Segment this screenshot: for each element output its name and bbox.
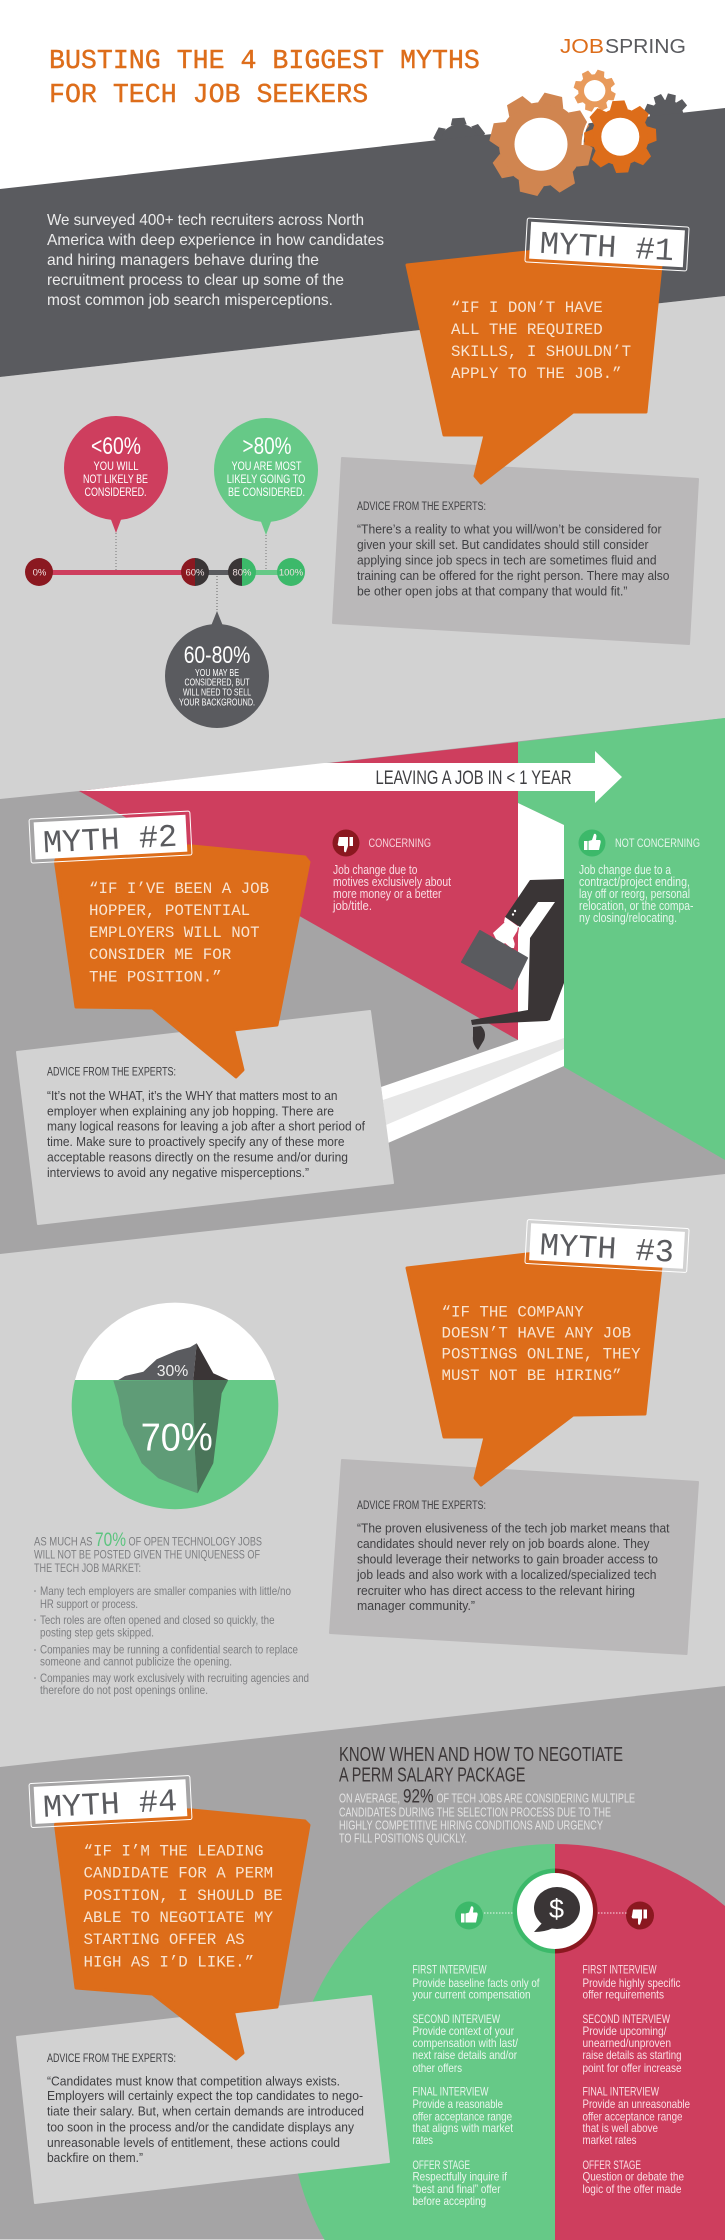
panel: myth 3 speech bubble: POSTINGS ONLINE, THEY xyxy=(442,1346,641,1364)
heading: negotiate a perm salary package: KNOW WHEN AND HOW TO NEGOTIATE xyxy=(339,1744,623,1766)
panel: not concerning: lay off or reorg, personal xyxy=(579,887,690,901)
intro text: recruitment process to clear up some of the xyxy=(47,272,344,289)
panel: myth 4 advice box xyxy=(17,1996,389,2203)
text block: as much as 70 percent: WILL NOT BE POSTED GIVEN THE UNIQUENESS OF xyxy=(34,1548,260,1562)
panel: myth 3 advice box: “The proven elusiveness of the tech job market means that xyxy=(357,1520,670,1536)
column: what to do: FINAL INTERVIEW xyxy=(412,2084,489,2098)
column: what to do: Respectfully inquire if xyxy=(412,2170,508,2184)
column: what to do: Provide a reasonable xyxy=(412,2097,503,2111)
timeline bar: 0% xyxy=(33,568,47,578)
panel: myth 3 advice box: ADVICE FROM THE EXPERTS: xyxy=(357,1500,486,1512)
panel: not concerning xyxy=(578,830,700,925)
list: reasons jobs are not posted: Companies may be running a confidential search to replace xyxy=(40,1642,298,1656)
bubble: over 80 percent: LIKELY GOING TO xyxy=(227,472,305,486)
gear: dark left xyxy=(432,118,486,166)
gear: tan large xyxy=(488,92,594,197)
column: what to do: FIRST INTERVIEW xyxy=(412,1962,487,1976)
column: what not to do: Provide an unreasonable xyxy=(582,2097,690,2111)
panel: myth 1 advice box xyxy=(333,458,698,644)
bubble: over 80 percent: BE CONSIDERED. xyxy=(228,485,305,499)
panel: not concerning: ny closing/relocating. xyxy=(579,911,677,925)
panel: myth 2 advice box: time. Make sure to proactively specify any of these more xyxy=(47,1134,344,1149)
bubble: under 60 percent: NOT LIKELY BE xyxy=(83,472,148,486)
text block: on average 92 percent: OF TECH JOBS ARE CONSIDERING MULTIPLE xyxy=(436,1792,635,1806)
column: what not to do: FIRST INTERVIEW xyxy=(582,1962,657,1976)
panel: myth 3 advice box: should leverage their networks to gain broader access to xyxy=(357,1552,658,1566)
panel: myth 1 speech bubble: APPLY TO THE JOB.” xyxy=(451,365,622,383)
column: what not to do: Question or debate the xyxy=(582,2170,684,2184)
list: reasons jobs are not posted xyxy=(34,1584,309,1697)
logo: Jobspring: JOB xyxy=(560,36,604,58)
gear: orange xyxy=(584,100,657,173)
panel: concerning xyxy=(332,830,451,913)
column: what to do: other offers xyxy=(412,2061,462,2075)
panel: myth 3 advice box xyxy=(330,1460,698,1654)
bubble: 60 to 80 percent: YOUR BACKGROUND. xyxy=(179,696,255,708)
icon: speech bubble with dollar sign: $ xyxy=(549,1894,564,1924)
panel: myth 4 advice box: tiate their salary. But, when certain demands are introduced xyxy=(47,2104,364,2118)
panel: concerning: motives exclusively about xyxy=(333,875,451,889)
column: what not to do: market rates xyxy=(582,2133,636,2147)
panel: myth 1 speech bubble: ALL THE REQUIRED xyxy=(451,321,603,339)
bubble: over 80 percent: >80% xyxy=(242,433,292,460)
column: what to do: Provide baseline facts only of xyxy=(412,1976,540,1990)
title: BUSTING THE 4 BIGGEST MYTHS xyxy=(49,46,480,76)
panel: leaving a job backdrop xyxy=(79,718,725,1160)
list: reasons jobs are not posted: Tech roles are often opened and closed so quickly, the xyxy=(40,1613,275,1627)
panel: myth 2 advice box: many logical reasons for leaving a job after a short period of xyxy=(47,1118,365,1134)
column: what to do: that aligns with market xyxy=(412,2121,514,2135)
text block: on average 92 percent: HIGHLY COMPETITIVE HIRING CONDITIONS AND URGENCY xyxy=(339,1818,603,1832)
panel: myth 2 speech bubble: EMPLOYERS WILL NOT xyxy=(89,924,260,942)
panel: myth 4 speech bubble: HIGH AS I’D LIKE.” xyxy=(84,1954,254,1972)
column: what to do: rates xyxy=(412,2133,433,2147)
bubble: 60 to 80 percent: YOU MAY BE xyxy=(195,667,239,679)
dark band xyxy=(0,108,725,377)
column: what to do: before accepting xyxy=(412,2194,486,2208)
arrow: leaving a job in under 1 year xyxy=(79,751,622,803)
panel: myth 4 speech bubble: CANDIDATE FOR A PERM xyxy=(84,1864,273,1882)
panel: myth 3 speech bubble: MUST NOT BE HIRING” xyxy=(442,1367,622,1385)
chart: negotiation do and don't circle xyxy=(290,1844,725,2240)
panel: myth 4 speech bubble: “IF I’M THE LEADING xyxy=(84,1842,264,1860)
panel: myth 3 advice box: job leads and also work with a localized/specialized tech xyxy=(356,1567,656,1582)
column: what not to do: logic of the offer made xyxy=(582,2182,682,2196)
panel: myth 1 advice box: applying since job specs in tech are sometimes fluid and xyxy=(357,552,656,568)
column: what not to do xyxy=(582,1962,690,2196)
bubble: under 60 percent: <60% xyxy=(91,433,141,460)
illustration: person walking out with briefcase xyxy=(462,879,564,1050)
list: reasons jobs are not posted: HR support or process. xyxy=(40,1597,138,1611)
panel: myth 1 advice box: given your skill set. But candidates should still consider xyxy=(357,537,649,552)
text block: on average 92 percent: CANDIDATES DURING THE SELECTION PROCESS DUE TO THE xyxy=(339,1806,611,1820)
bubble: under 60 percent xyxy=(64,416,168,570)
text block: on average 92 percent: 92% xyxy=(403,1786,434,1808)
timeline bar: 100% xyxy=(279,568,304,578)
text block: on average 92 percent: TO FILL POSITIONS QUICKLY. xyxy=(339,1832,467,1846)
list: reasons jobs are not posted: Companies may work exclusively with recruiting agencies and xyxy=(40,1671,309,1685)
bubble: 60 to 80 percent: 60-80% xyxy=(184,642,250,669)
panel: myth 4 advice box: backfire on them.” xyxy=(47,2150,143,2165)
panel: myth 4 speech bubble: ABLE TO NEGOTIATE MY xyxy=(84,1909,274,1927)
panel: myth 2 advice box: acceptable reasons directly on the resume and/or during xyxy=(47,1150,348,1164)
heading: negotiate a perm salary package xyxy=(339,1744,623,1786)
panel: myth 2 advice box: employer when explaining any job hopping. There are xyxy=(47,1104,334,1118)
column: what not to do: Provide highly specific xyxy=(582,1976,680,1990)
panel: myth 4 speech bubble: STARTING OFFER AS xyxy=(84,1931,245,1949)
panel: not concerning: Job change due to a xyxy=(579,863,671,877)
column: what to do: SECOND INTERVIEW xyxy=(412,2012,500,2026)
bubble: over 80 percent xyxy=(214,418,318,570)
bubble: over 80 percent: YOU ARE MOST xyxy=(232,459,302,473)
logo: Jobspring: SPRING xyxy=(605,36,686,58)
panel: concerning: CONCERNING xyxy=(368,836,431,850)
column: what to do: OFFER STAGE xyxy=(412,2158,470,2172)
panel: myth 3 advice box: recruiter who has direct access to the relevant hiring xyxy=(357,1583,635,1598)
list: reasons jobs are not posted: someone and cannot publicize the opening. xyxy=(40,1654,232,1668)
panel: myth 1 advice box: be other open jobs at that company that would fit.” xyxy=(357,584,628,598)
intro text: and hiring managers behave during the xyxy=(47,252,319,269)
heading: negotiate a perm salary package: A PERM SALARY PACKAGE xyxy=(339,1764,526,1786)
list: reasons jobs are not posted: posting step gets skipped. xyxy=(40,1626,154,1640)
arrow: leaving a job in under 1 year: LEAVING A JOB IN < 1 YEAR xyxy=(376,767,572,789)
bubble: under 60 percent: YOU WILL xyxy=(94,459,139,473)
panel: myth 2 advice box: ADVICE FROM THE EXPERTS: xyxy=(47,1066,176,1078)
column: what not to do: SECOND INTERVIEW xyxy=(582,2012,670,2026)
timeline bar: 80% xyxy=(232,568,252,578)
icon: speech bubble with dollar sign xyxy=(512,1868,598,1954)
panel: myth 1 speech bubble: SKILLS, I SHOULDN’T xyxy=(451,343,631,361)
column: what not to do: raise details as starting xyxy=(582,2048,682,2062)
icon: front gears xyxy=(488,92,657,197)
timeline bar xyxy=(25,558,305,586)
panel: not concerning: NOT CONCERNING xyxy=(615,836,700,850)
panel: myth 4 advice box: Employers will certainly expect the top candidates to nego- xyxy=(47,2088,363,2103)
text block: as much as 70 percent: OF OPEN TECHNOLOGY JOBS xyxy=(128,1534,262,1548)
panel: myth 3 speech bubble: “IF THE COMPANY xyxy=(442,1304,584,1322)
column: what to do: next raise details and/or xyxy=(412,2048,517,2062)
panel: myth 2 speech bubble: HOPPER, POTENTIAL xyxy=(89,902,250,920)
icon: thumbs down xyxy=(626,1902,654,1930)
title: FOR TECH JOB SEEKERS xyxy=(49,80,368,110)
column: what not to do: offer requirements xyxy=(582,1988,664,2002)
label: myth 3 xyxy=(525,1220,689,1272)
column: what not to do: point for offer increase xyxy=(582,2061,682,2075)
bubble: under 60 percent: CONSIDERED. xyxy=(84,485,146,499)
title xyxy=(49,46,480,110)
text block: as much as 70 percent: THE TECH JOB MARKET: xyxy=(34,1561,141,1575)
panel: myth 2 speech bubble xyxy=(56,845,309,1077)
icon: thumbs up xyxy=(578,830,606,856)
intro text: most common job search misperceptions. xyxy=(47,292,333,309)
gear: light orange xyxy=(573,69,616,112)
icon: thumbs down xyxy=(332,830,360,856)
panel: myth 3 speech bubble xyxy=(407,1239,664,1485)
column: what to do: Provide context of your xyxy=(412,2024,514,2038)
panel: concerning: more money or a better xyxy=(333,887,442,901)
bubble: 60 to 80 percent: WILL NEED TO SELL xyxy=(183,686,251,698)
column: what not to do: FINAL INTERVIEW xyxy=(582,2084,659,2098)
list: reasons jobs are not posted: therefore do not post openings online. xyxy=(40,1683,208,1697)
label: myth 1: MYTH #1 xyxy=(539,226,675,270)
panel: myth 4 speech bubble xyxy=(56,1808,309,2059)
chart: iceberg 30 / 70: 30% xyxy=(157,1363,188,1380)
text block: on average 92 percent xyxy=(339,1786,635,1846)
panel: myth 2 advice box xyxy=(17,1011,393,1224)
panel: myth 4 advice box: “Candidates must know that competition always exists. xyxy=(47,2074,340,2088)
label: myth 4: MYTH #4 xyxy=(42,1783,178,1827)
panel: myth 2 speech bubble: THE POSITION.” xyxy=(89,968,222,986)
text block: as much as 70 percent: 70% xyxy=(95,1530,126,1551)
timeline bar: 60% xyxy=(185,568,205,578)
panel: myth 1 advice box: ADVICE FROM THE EXPERTS: xyxy=(357,501,486,513)
panel: myth 2 speech bubble: “IF I’VE BEEN A JOB xyxy=(89,880,269,898)
column: what to do: offer acceptance range xyxy=(412,2110,512,2124)
panel: myth 2 speech bubble: CONSIDER ME FOR xyxy=(89,946,232,964)
panel: concerning: job/title. xyxy=(332,899,372,913)
logo: Jobspring xyxy=(560,36,686,58)
panel: myth 2 advice box: interviews to avoid any negative misperceptions.” xyxy=(47,1165,309,1180)
intro text: America with deep experience in how candidates xyxy=(47,232,384,249)
column: what to do: compensation with last/ xyxy=(412,2036,519,2050)
panel: myth 1 advice box: “There’s a reality to what you will/won’t be considered for xyxy=(357,522,662,536)
panel: myth 3 advice box: manager community.” xyxy=(357,1598,475,1613)
panel: not concerning: contract/project ending, xyxy=(579,875,690,889)
panel: myth 4 advice box: too soon in the process and/or the candidate displays any xyxy=(47,2120,354,2134)
label: myth 1 xyxy=(525,218,689,271)
column: what to do: “best and final” offer xyxy=(412,2182,500,2196)
panel: myth 4 advice box: unreasonable levels of entitlement, these actions could xyxy=(47,2135,340,2150)
list: reasons jobs are not posted: Many tech employers are smaller companies with little/no xyxy=(40,1584,291,1598)
panel: myth 3 speech bubble: DOESN’T HAVE ANY JOB xyxy=(442,1324,631,1342)
intro text xyxy=(47,212,384,309)
column: what not to do: that is well above xyxy=(582,2121,658,2135)
column: what not to do: unearned/unproven xyxy=(582,2036,671,2050)
chart: skills match timeline xyxy=(25,416,318,728)
label: myth 2: MYTH #2 xyxy=(42,819,178,862)
intro text: We surveyed 400+ tech recruiters across North xyxy=(47,212,364,229)
bubble: 60 to 80 percent: CONSIDERED, BUT xyxy=(184,676,250,688)
panel: myth 4 advice box: ADVICE FROM THE EXPERTS: xyxy=(47,2053,176,2065)
icon: gears xyxy=(432,69,688,166)
panel: myth 1 speech bubble xyxy=(407,236,664,483)
panel: myth 2 advice box: “It’s not the WHAT, it’s the WHY that matters most to an xyxy=(47,1088,338,1103)
bubble: 60 to 80 percent xyxy=(165,576,269,728)
label: myth 3: MYTH #3 xyxy=(539,1227,675,1272)
panel: myth 1 speech bubble: “IF I DON’T HAVE xyxy=(451,299,603,317)
panel: myth 4 speech bubble: POSITION, I SHOULD BE xyxy=(84,1887,283,1905)
panel: myth 1 advice box: training can be offered for the right person. There may also xyxy=(357,568,670,583)
panel: myth 3 advice box: candidates should never rely on job boards alone. They xyxy=(357,1536,650,1551)
gear: dark right xyxy=(644,93,688,134)
text block: on average 92 percent: ON AVERAGE, xyxy=(339,1792,400,1806)
column: what not to do: offer acceptance range xyxy=(582,2110,683,2124)
chart: iceberg 30 / 70 xyxy=(72,1303,278,1509)
text block: as much as 70 percent: AS MUCH AS xyxy=(34,1534,92,1548)
column: what not to do: OFFER STAGE xyxy=(582,2158,641,2172)
panel: not concerning: relocation, or the compa- xyxy=(579,899,694,913)
column: what not to do: Provide upcoming/ xyxy=(582,2024,667,2038)
chart: iceberg 30 / 70: 70% xyxy=(141,1416,213,1460)
column: what to do: your current compensation xyxy=(412,1988,530,2002)
text block: as much as 70 percent xyxy=(34,1530,262,1575)
icon: thumbs up xyxy=(455,1902,483,1930)
column: what to do xyxy=(412,1962,540,2208)
panel: concerning: Job change due to xyxy=(333,863,418,877)
